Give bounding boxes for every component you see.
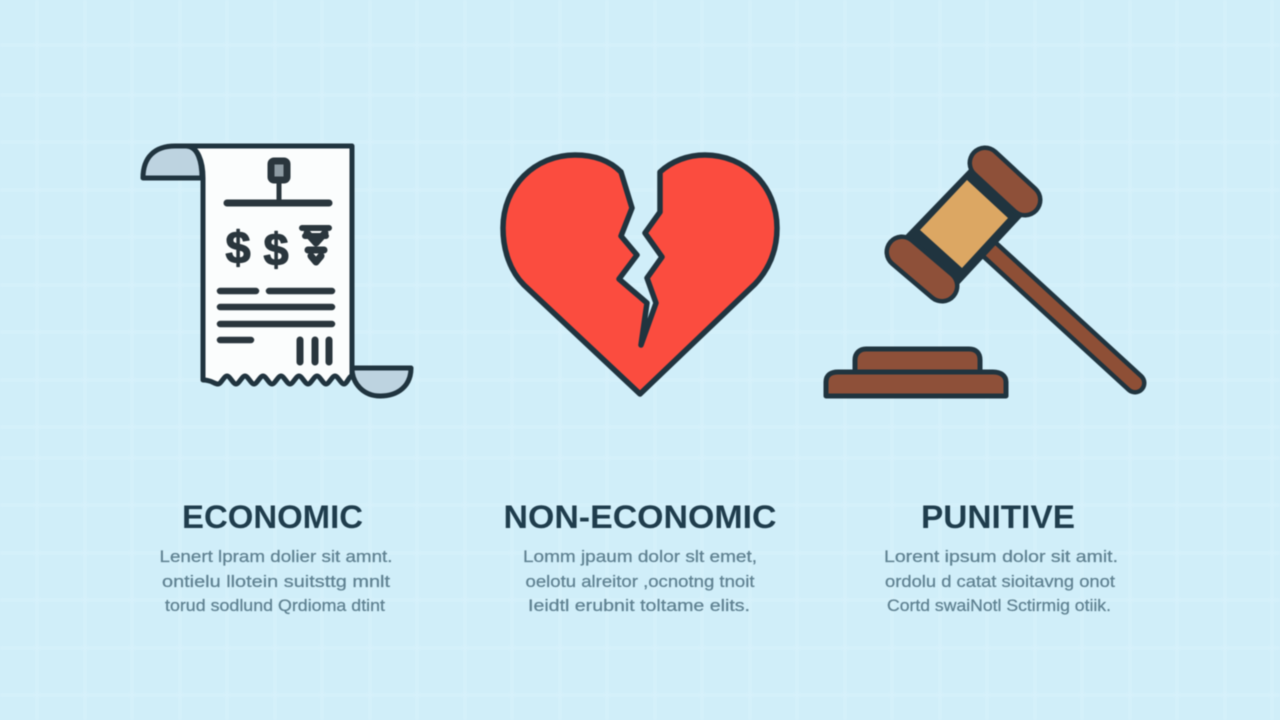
text block: non-economic: Lomm jpaum dolor slt emet,	[523, 547, 757, 566]
receipt currency symbols	[225, 222, 329, 275]
receipt stamp	[227, 161, 329, 203]
text block: economic: torud sodlund Qrdioma dtint	[165, 596, 385, 615]
text block: non-economic: oelotu alreitor ,ocnotng tnoit	[526, 572, 755, 591]
text block: punitive	[884, 547, 1118, 615]
gavel bottom cap	[902, 252, 942, 286]
icon: broken heart	[503, 155, 777, 394]
text block: economic: Lenert lpram dolier sit amnt.	[160, 547, 392, 566]
text block: economic: ontielu llotein suitsttg mnlt	[162, 572, 390, 591]
sound block	[826, 349, 1006, 396]
gavel top cap	[985, 163, 1025, 200]
receipt currency symbols: $	[225, 222, 251, 273]
text block: punitive: Lorent ipsum dolor sit amit.	[884, 547, 1118, 566]
receipt text lines	[220, 291, 332, 340]
gavel handle	[990, 250, 1135, 383]
gavel barrel	[898, 160, 1030, 292]
receipt currency symbols: $	[263, 224, 289, 275]
text block: punitive: Cortd swaiNotl Sctirmig otiik.	[887, 596, 1111, 615]
text block: non-economic	[523, 547, 757, 615]
column: punitive	[884, 499, 1118, 615]
heading: punitive: PUNITIVE	[921, 499, 1075, 535]
text block: economic	[160, 547, 392, 615]
column: non-economic	[504, 499, 776, 615]
receipt bottom-right curl	[352, 368, 411, 396]
icon: gavel	[826, 160, 1135, 396]
receipt paper	[186, 146, 352, 384]
column: economic	[160, 499, 392, 615]
receipt bars	[300, 340, 329, 362]
text block: punitive: ordolu d catat sioitavng onot	[885, 572, 1115, 591]
receipt top-left curl	[143, 146, 202, 178]
heading: non-economic: NON-ECONOMIC	[504, 499, 776, 535]
icon: receipt	[143, 146, 411, 396]
heading: economic: ECONOMIC	[182, 499, 363, 535]
text block: non-economic: Ieidtl erubnit toltame elits.	[528, 596, 750, 615]
